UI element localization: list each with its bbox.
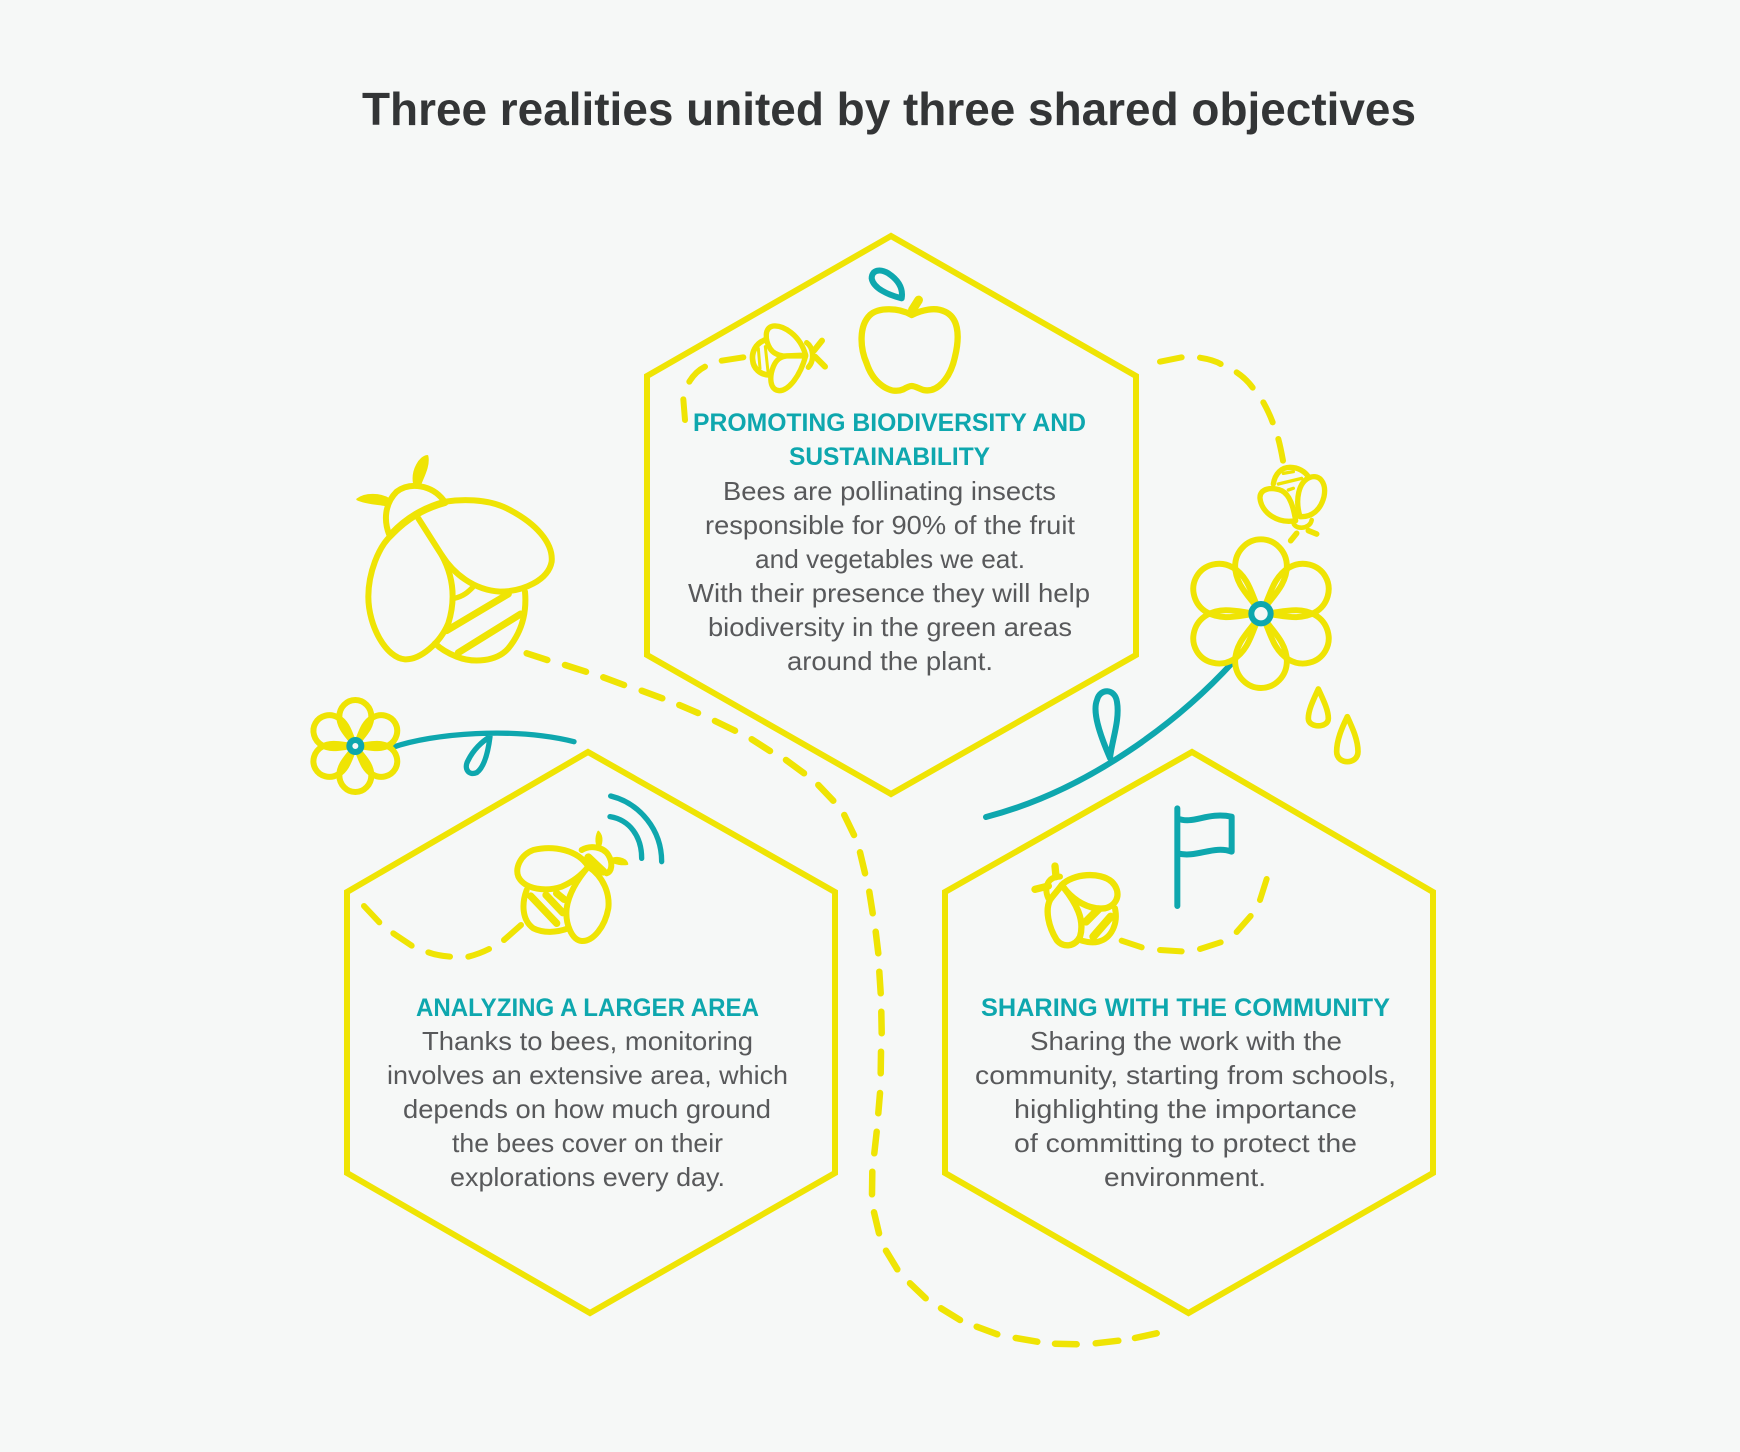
text block: thanks to bees bbox=[387, 1026, 788, 1192]
icon: small flower with stem bbox=[307, 700, 574, 792]
icon: bee with signal waves and trail bbox=[364, 796, 662, 957]
icon: bee and trail bbox=[1035, 866, 1267, 951]
heading: promoting biodiversity: PROMOTING BIODIVERSITY AND bbox=[693, 409, 1086, 437]
text block: bees are pollinating: and vegetables we eat. bbox=[755, 544, 1025, 574]
icon: water drops bbox=[1308, 689, 1358, 762]
dashed flight trail: large bee bbox=[527, 653, 1157, 1344]
panel: promoting biodiversity bbox=[647, 236, 1136, 794]
text block: sharing the work: highlighting the importance bbox=[1014, 1094, 1357, 1124]
hexagon: right bbox=[945, 752, 1433, 1313]
icon: flag bbox=[1177, 808, 1232, 906]
text block: thanks to bees: explorations every day. bbox=[450, 1162, 725, 1192]
icon: stem and leaf of large flower bbox=[986, 662, 1233, 817]
heading: promoting biodiversity bbox=[693, 409, 1086, 471]
icon: large flower bbox=[1184, 539, 1338, 688]
text block: thanks to bees: depends on how much ground bbox=[403, 1094, 771, 1124]
icon: top-right bee and trail bbox=[1160, 357, 1325, 541]
text block: bees are pollinating: around the plant. bbox=[787, 646, 993, 676]
panel: sharing with the community bbox=[945, 752, 1433, 1313]
text block: bees are pollinating bbox=[688, 476, 1090, 676]
text block: bees are pollinating: Bees are pollinating insects bbox=[723, 476, 1056, 506]
text block: bees are pollinating: biodiversity in the green areas bbox=[708, 612, 1072, 642]
text block: thanks to bees: Thanks to bees, monitoring bbox=[422, 1026, 753, 1056]
text block: bees are pollinating: responsible for 90% of the fruit bbox=[705, 510, 1076, 540]
text block: bees are pollinating: With their presence they will help bbox=[688, 578, 1090, 608]
text block: sharing the work: environment. bbox=[1104, 1162, 1266, 1192]
icon: large bee bbox=[357, 456, 552, 660]
text block: sharing the work: Sharing the work with the bbox=[1030, 1026, 1342, 1056]
hexagon: top bbox=[647, 236, 1136, 794]
text block: sharing the work: of committing to protect the bbox=[1014, 1128, 1357, 1158]
text block: sharing the work: community, starting from schools, bbox=[975, 1060, 1396, 1090]
heading: promoting biodiversity: SUSTAINABILITY bbox=[789, 443, 990, 471]
text block: sharing the work bbox=[975, 1026, 1396, 1192]
hexagon: left bbox=[347, 752, 835, 1313]
title: Three realities united by three shared objectives bbox=[362, 83, 1416, 135]
heading: sharing with the community: SHARING WITH THE COMMUNITY bbox=[981, 994, 1390, 1022]
icon: apple and leaf bbox=[862, 271, 958, 391]
text block: thanks to bees: the bees cover on their bbox=[452, 1128, 723, 1158]
panel: analyzing a larger area bbox=[347, 752, 835, 1313]
heading: analyzing a larger area: ANALYZING A LARGER AREA bbox=[416, 994, 759, 1022]
icon: small bee and trail bbox=[683, 326, 825, 420]
text block: thanks to bees: involves an extensive area, which bbox=[387, 1060, 788, 1090]
